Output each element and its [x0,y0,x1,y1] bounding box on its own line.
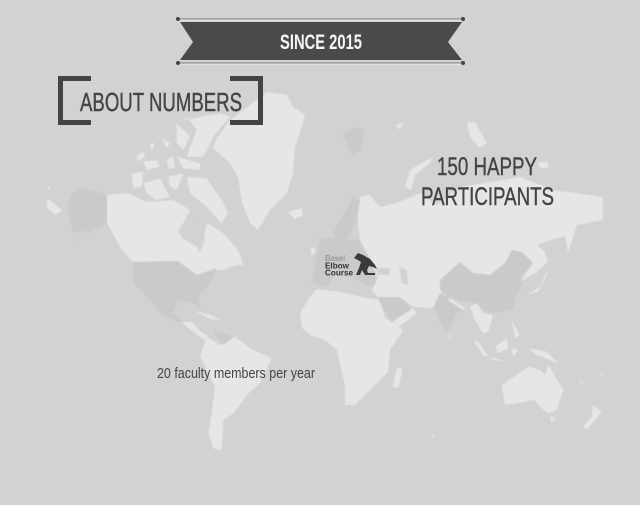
logo: Basel Elbow Course: Elbow [325,260,349,270]
Greenland [213,92,305,230]
banner: since 2015: SINCE 2015 [280,31,362,54]
banner: since 2015 [176,17,465,65]
North America [47,113,243,340]
heading: about numbers with brackets [60,78,260,122]
world map [47,92,604,450]
South America [200,330,272,450]
logo: Basel Elbow Course: Basel [325,253,345,263]
heading: about numbers with brackets: ABOUT NUMBERS [80,87,242,117]
Oceania and Southeast Asia [393,320,604,437]
callout: happy participants: PARTICIPANTS [421,183,554,211]
Iceland [288,208,303,219]
Eurasia [311,177,603,333]
Arctic islands [343,122,548,190]
callout: faculty members: 20 faculty members per year [157,365,315,382]
logo: Basel Elbow Course: Course [325,268,353,278]
callout: happy participants: 150 HAPPY [437,153,537,181]
logo: Basel Elbow Course [325,253,377,278]
Africa [300,289,403,405]
